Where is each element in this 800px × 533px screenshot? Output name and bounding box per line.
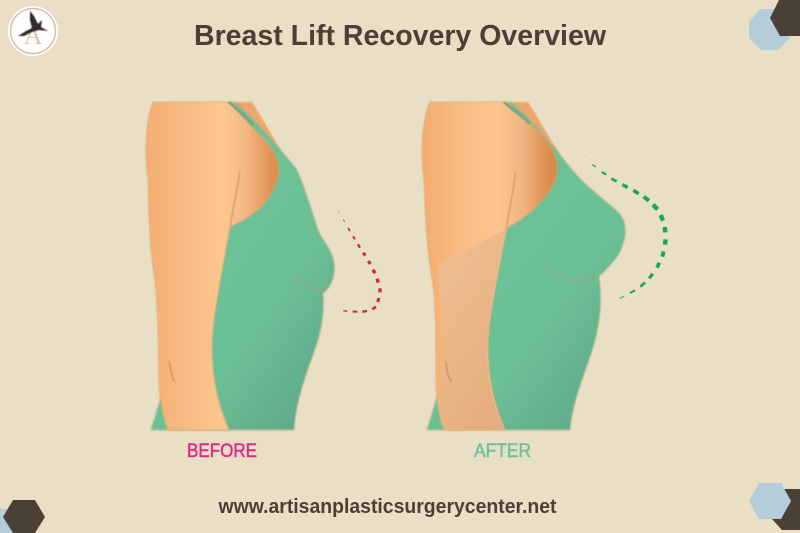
decoration: bottom right hexagons [749,483,800,530]
after back shoulder [503,102,559,160]
title: Breast Lift Recovery Overview [194,20,607,52]
decoration: top right hexagons [749,0,800,50]
website url: www.artisanplasticsurgerycenter.net [218,496,557,518]
after dashed contour [585,155,666,298]
before arm crease [230,171,240,227]
after arm [422,102,557,430]
label: before: BEFORE [187,441,257,462]
logo letter: A [24,21,43,50]
after arm crease [506,171,516,229]
after torso garment [427,102,625,430]
before torso garment [151,102,334,430]
figure: after [422,102,666,430]
logo badge [6,4,60,58]
logo bird [18,11,48,36]
label: after: AFTER [474,441,531,462]
before elbow crease [169,361,175,382]
before dashed contour [338,211,380,312]
after breast fold [547,267,599,281]
before strap [229,102,253,125]
after elbow crease [446,362,452,382]
after strap [504,102,530,124]
before arm [146,102,279,430]
after translucent forearm overlay [437,229,506,430]
figure: before [146,102,380,430]
decoration: bottom left hexagons [0,500,45,533]
before back shoulder [228,102,283,160]
before breast fold [293,274,324,289]
